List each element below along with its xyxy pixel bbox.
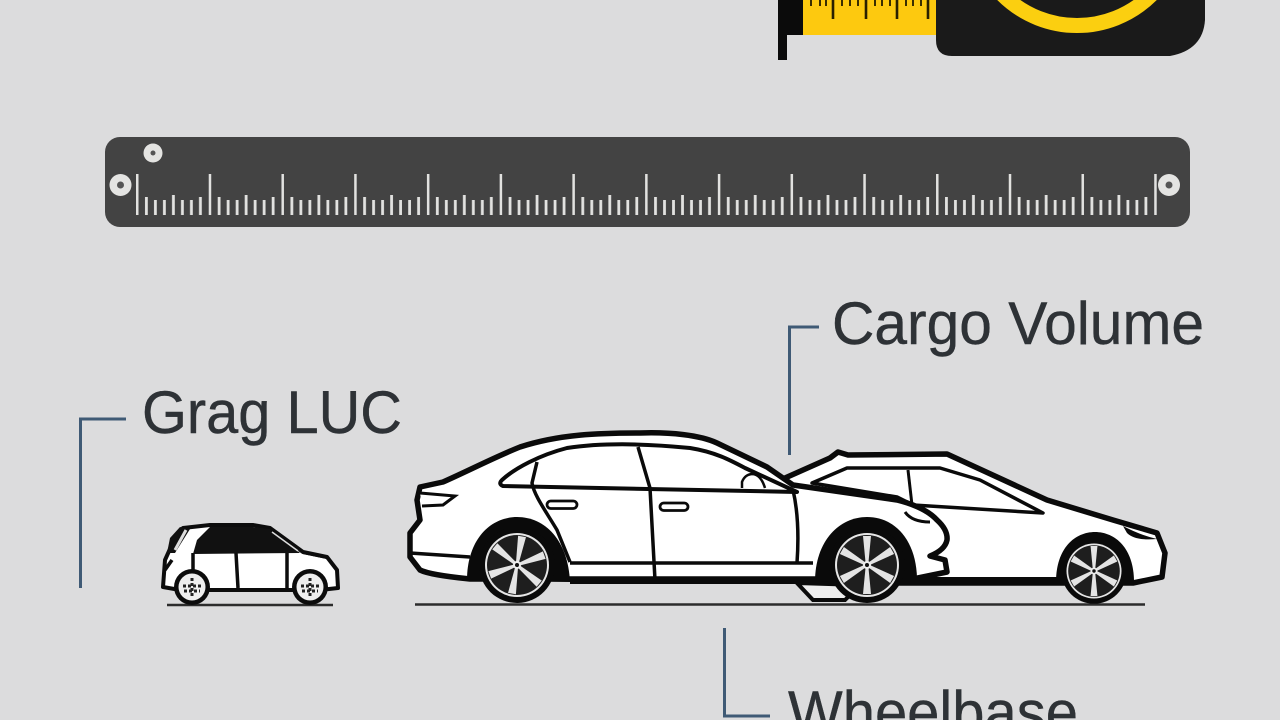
tape blade	[803, 0, 937, 35]
sedan front wheel	[829, 527, 905, 603]
label: Cargo Volume	[790, 290, 1204, 455]
ruler ticks	[136, 170, 1157, 220]
sedan body	[410, 433, 947, 579]
door lines	[410, 447, 813, 580]
tape case	[936, 0, 1205, 56]
rear car window frame	[812, 468, 1043, 513]
small front wheel	[292, 569, 328, 605]
rear car wheel arch	[1056, 532, 1134, 582]
headlight	[905, 512, 930, 522]
rear car wheel	[1061, 538, 1127, 604]
label: Wheelbase	[724, 628, 1078, 720]
icon: main sedan	[410, 433, 947, 609]
sedan window line	[500, 444, 797, 492]
label: Cargo Volume: Cargo Volume	[832, 290, 1204, 357]
icon: small hatchback	[163, 525, 338, 605]
icon: rear car	[785, 452, 1165, 604]
icon: tape measure	[778, 0, 1205, 60]
tinted roof	[193, 527, 300, 554]
tape dial ring	[972, 0, 1182, 26]
label: Grag LUC	[80, 379, 402, 588]
sedan sill	[570, 578, 815, 584]
ruler	[105, 137, 1190, 227]
door handles	[547, 501, 577, 508]
side mirror	[742, 474, 765, 488]
tail light	[420, 493, 455, 506]
ruler rivets	[110, 144, 1180, 196]
door lines	[165, 553, 287, 590]
tape hook	[778, 0, 803, 60]
sedan front arch	[815, 517, 917, 582]
ground line	[415, 603, 1145, 606]
small ground line	[167, 604, 333, 606]
small rear wheel	[174, 569, 210, 605]
rear car headlight	[1123, 526, 1157, 539]
sedan rear wheel	[473, 521, 561, 609]
rear car sill	[905, 577, 1075, 584]
label: Grag LUC: Grag LUC	[142, 379, 402, 446]
under bumper	[797, 583, 860, 600]
sedan rear arch	[467, 517, 570, 582]
